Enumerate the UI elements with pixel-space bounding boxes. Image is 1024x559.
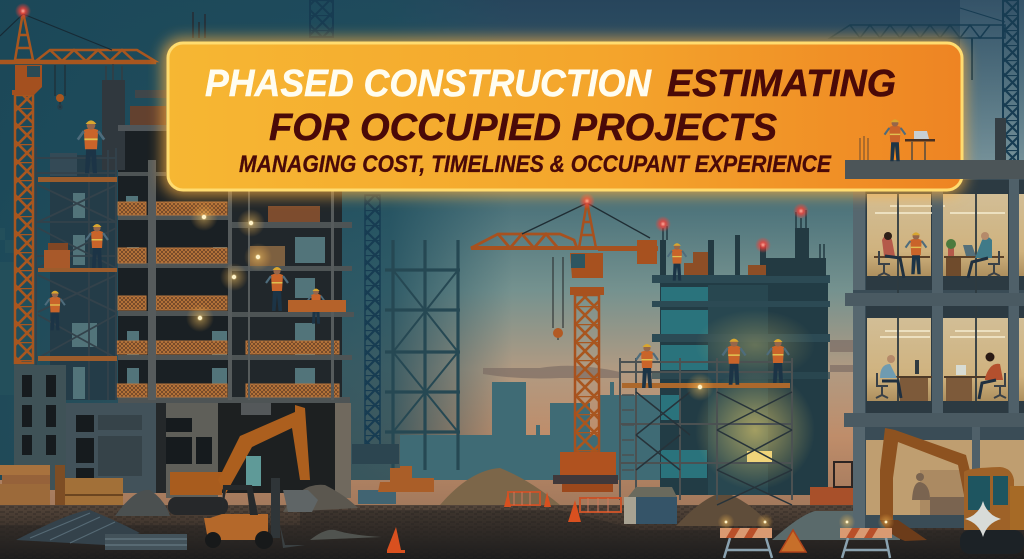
occupants upper floor — [874, 232, 1004, 278]
far-left silhouette building — [0, 228, 40, 395]
traffic cone bottom — [387, 527, 405, 553]
orange crates on roof — [684, 263, 708, 275]
timber stack on slab — [268, 206, 320, 222]
dark interior — [118, 130, 233, 400]
rebar on roof — [860, 136, 868, 160]
barricade right — [839, 514, 894, 558]
foundation block and orange equipment — [352, 444, 434, 504]
left tower crane — [0, 3, 155, 363]
forklift — [204, 478, 305, 549]
workers on left scaffold — [78, 120, 104, 173]
title line 2: FOR OCCUPIED PROJECTS — [269, 107, 777, 149]
warning triangle — [780, 530, 806, 552]
ground-floor lobby — [866, 427, 1024, 441]
barricade mid — [718, 514, 773, 558]
right building roof overlap on panel — [845, 160, 1024, 179]
upper forms — [130, 106, 166, 125]
worker with laptop on roof — [885, 119, 935, 161]
scaffold work lamp — [686, 373, 714, 401]
central tower crane — [471, 193, 658, 492]
background crane top right — [830, 0, 1018, 165]
jib — [471, 234, 577, 248]
orange stacked crates — [44, 250, 70, 268]
crane mast — [15, 95, 33, 363]
base — [560, 452, 616, 475]
crane hook — [55, 65, 65, 108]
mast — [575, 295, 599, 453]
workers on left building — [266, 267, 346, 324]
subtitle: MANAGING COST, TIMELINES & OCCUPANT EXPERIENCE — [239, 151, 832, 178]
occupant ground floor — [912, 473, 970, 515]
mast stub above panel — [193, 12, 205, 38]
mid scaffold — [620, 339, 792, 505]
slabs — [845, 160, 1024, 179]
barrier fences and cones — [504, 492, 621, 522]
crane peak — [15, 12, 33, 60]
gravel piles — [115, 468, 900, 540]
slabs — [652, 275, 830, 379]
shipping container — [624, 487, 677, 524]
worker on roof — [668, 243, 686, 281]
small orange roller by right building — [810, 462, 853, 505]
excavator left — [168, 405, 318, 515]
right building with occupied offices — [844, 160, 1024, 531]
scaffold plank — [622, 383, 790, 388]
crane cables — [0, 14, 112, 50]
dark mast stub beside crane — [995, 118, 1006, 160]
window panes — [72, 193, 325, 399]
floor slabs — [118, 172, 354, 403]
left scaffolding — [36, 120, 117, 400]
lower concrete base of left building — [14, 365, 351, 498]
lumber stacks — [0, 465, 123, 512]
steel rebar pile — [16, 510, 187, 550]
concrete columns — [148, 160, 334, 400]
title panel — [162, 38, 966, 196]
crane cab — [12, 65, 42, 95]
site flood lights — [186, 203, 272, 332]
clouds — [483, 340, 875, 378]
railings — [117, 202, 339, 397]
ground — [0, 505, 1024, 559]
counterweight — [637, 240, 657, 264]
title line 1 white: PHASED CONSTRUCTION — [205, 63, 652, 105]
panel glow — [162, 38, 966, 196]
red lamp — [15, 3, 31, 19]
background: lighter sky at right edge — [960, 0, 1024, 165]
red lamps — [655, 216, 671, 232]
tall column — [102, 80, 125, 170]
cab — [570, 253, 603, 278]
background crane top — [310, 0, 333, 37]
ceiling lights — [875, 206, 1005, 337]
red lamp — [579, 193, 595, 209]
window mullions — [898, 193, 976, 413]
scaffold planks — [38, 177, 117, 361]
dark window openings — [22, 375, 212, 478]
mid building under construction — [652, 203, 830, 495]
office rooms — [866, 180, 932, 290]
glow on wall — [695, 370, 815, 490]
occupants middle floor — [876, 352, 1006, 401]
teal glazing — [661, 287, 708, 478]
roof columns and forms — [660, 210, 826, 276]
excavator right — [880, 428, 1024, 554]
tower cables — [522, 203, 650, 238]
scaffold workers — [636, 344, 658, 388]
crane jib — [0, 50, 155, 63]
background blue lattice mast — [365, 195, 380, 445]
hook — [553, 257, 563, 340]
background scaffold tower — [385, 240, 460, 470]
columns — [853, 178, 865, 290]
left building under construction — [50, 64, 354, 403]
panel body — [168, 43, 962, 190]
distant skyline — [400, 382, 660, 480]
peak — [579, 202, 596, 248]
title line 1 dark: ESTIMATING — [667, 63, 896, 105]
